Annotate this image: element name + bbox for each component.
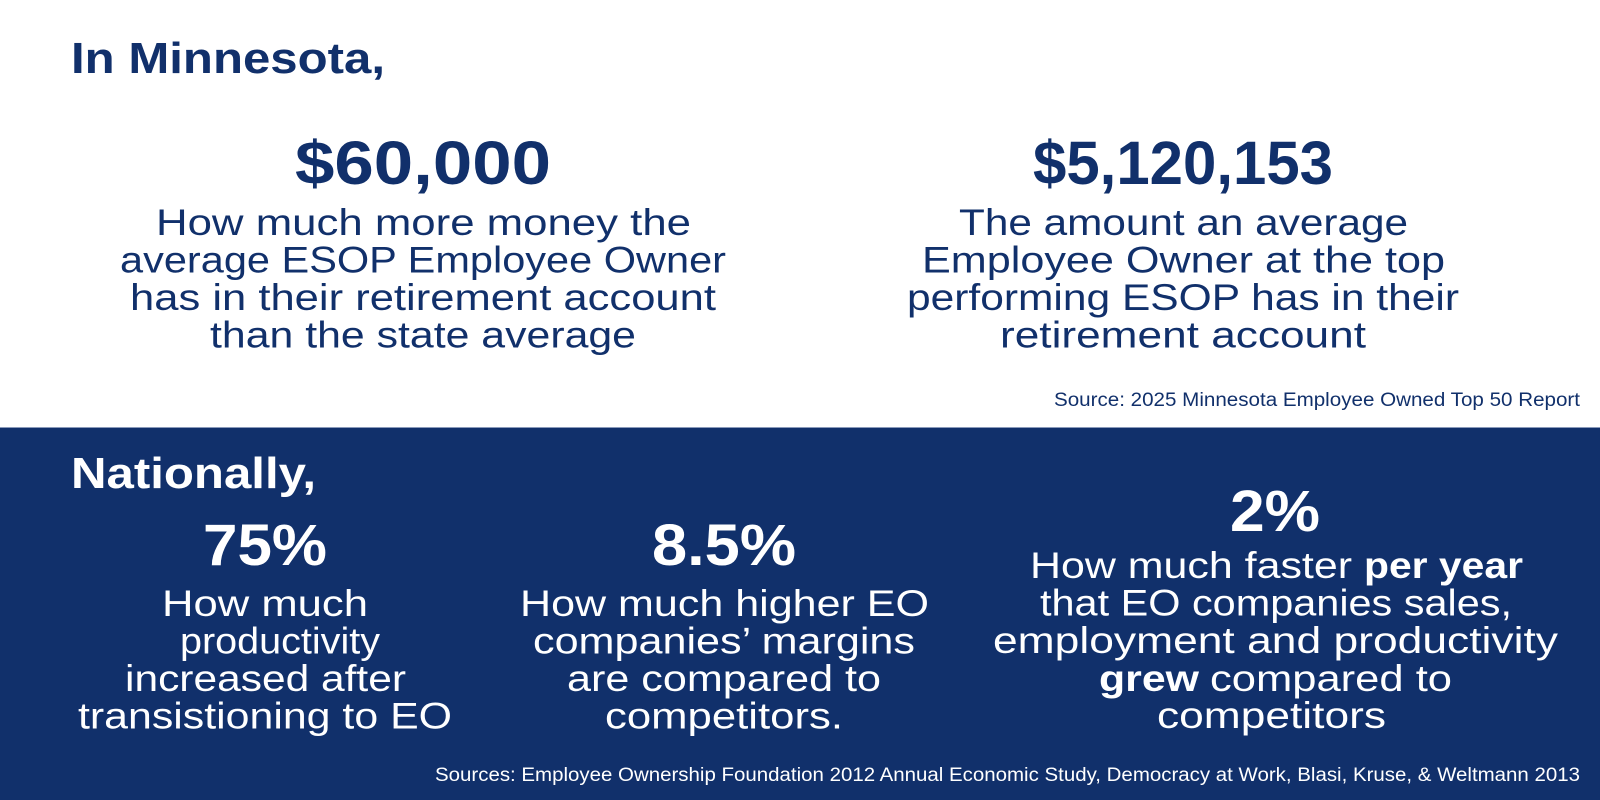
stat description: that EO companies sales, [1040,582,1512,624]
stat description: productivity [180,620,381,662]
stat number: 8.5% [652,513,796,578]
stat description: competitors [1157,695,1386,736]
stat: $60,000 [120,129,726,356]
stat number: $60,000 [295,129,551,197]
stat description: has in their retirement account [130,277,717,318]
stat description: compared to [1210,658,1452,699]
source note: Minnesota: Source: 2025 Minnesota Employee Owned Top 50 Report [1054,390,1581,411]
stat number: 2% [1230,479,1320,544]
stat description [78,583,452,736]
panel: Minnesota [0,0,1600,428]
stat description: are compared to [567,658,881,699]
stat description: How much faster [1030,545,1352,586]
stat description: How much more money the [156,202,691,243]
stat description: retirement account [1000,314,1367,356]
stat description: grew [1099,658,1199,699]
stat description: performing ESOP has in their [907,277,1459,318]
stat description: per year [1364,545,1523,586]
stat description [120,202,726,356]
stat description: employment and productivity [993,620,1559,661]
stat description: competitors. [605,696,843,736]
stat description: than the state average [210,314,636,356]
stat description [907,202,1459,356]
stat description: transistioning to EO [78,696,452,736]
stat description: How much higher EO [520,583,929,624]
stat number: $5,120,153 [1033,129,1333,197]
stat description: increased after [125,658,406,699]
stat number: 75% [203,513,327,578]
stat: 75% [78,513,452,736]
stat description [993,545,1559,736]
stat: $5,120,153 [907,129,1459,356]
panel: Nationally [0,427,1600,800]
heading: In Minnesota: In Minnesota, [71,34,385,83]
stat description [520,583,929,736]
stat description: The amount an average [959,202,1408,243]
source note: national: Sources: Employee Ownership Foundation 2012 Annual Economic Study, Democracy at Work, Blasi, Kruse, & Weltmann 2013 [435,765,1580,786]
stat description: average ESOP Employee Owner [120,240,726,280]
heading: Nationally: Nationally, [71,449,316,498]
stat: 8.5% [520,513,929,736]
stat description: How much [162,583,368,624]
stat description: Employee Owner at the top [922,240,1445,280]
stat: 2% [993,479,1559,736]
stat description: companies’ margins [533,620,915,662]
